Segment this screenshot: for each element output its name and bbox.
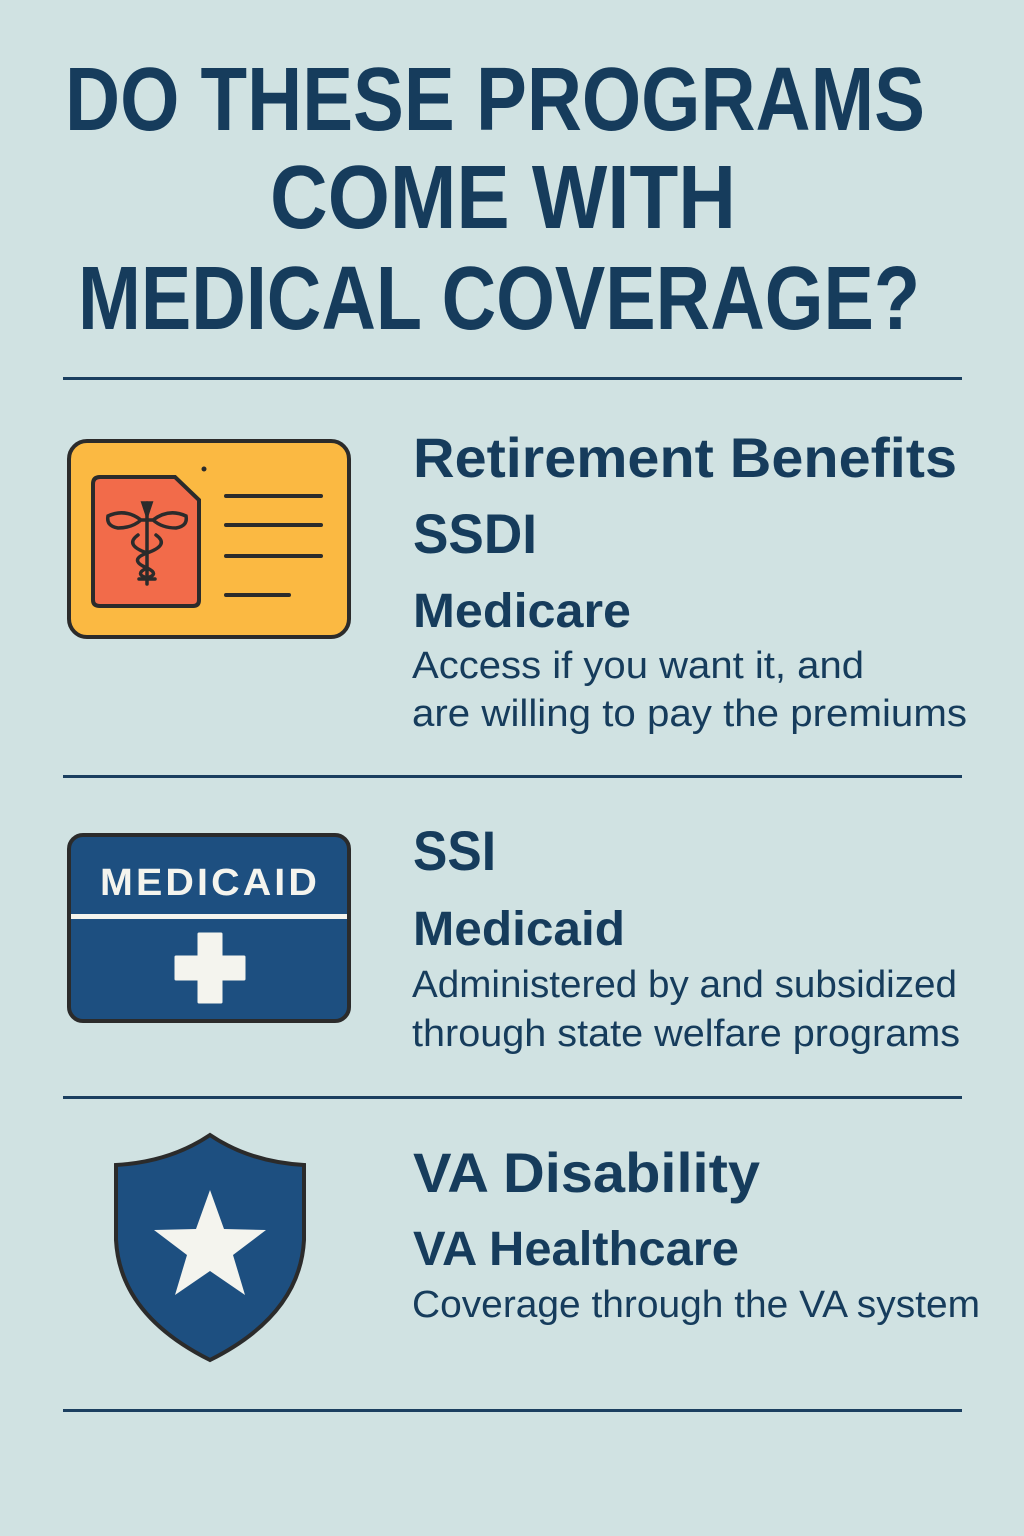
text: medicaid (412, 903, 960, 1055)
title: COME WITH (270, 148, 736, 248)
icon: medicaid card: MEDICAID (100, 862, 320, 904)
title (65, 50, 925, 349)
icon: medicare card (69, 441, 349, 637)
text: medicaid: through state welfare programs (412, 1013, 960, 1055)
text: medicaid: Administered by and subsidized (412, 964, 957, 1006)
heading: retirement / ssdi: Retirement Benefits (413, 426, 957, 489)
heading: ssi: SSI (413, 819, 496, 882)
text: va healthcare: VA Healthcare (413, 1223, 739, 1276)
heading: va disability: VA Disability (413, 1141, 760, 1204)
text: medicare: Medicare (413, 585, 631, 638)
heading: retirement / ssdi: SSDI (413, 502, 537, 565)
heading: retirement / ssdi (413, 426, 957, 565)
text: va healthcare: Coverage through the VA system (412, 1284, 980, 1326)
text: medicare: Access if you want it, and (412, 645, 864, 687)
text: medicaid: Medicaid (413, 903, 625, 956)
icon: medicaid card (69, 835, 349, 1021)
text: medicare (412, 585, 967, 735)
text: medicare: are willing to pay the premiums (412, 693, 967, 735)
icon: va shield (116, 1135, 304, 1360)
text: va healthcare (412, 1223, 980, 1326)
